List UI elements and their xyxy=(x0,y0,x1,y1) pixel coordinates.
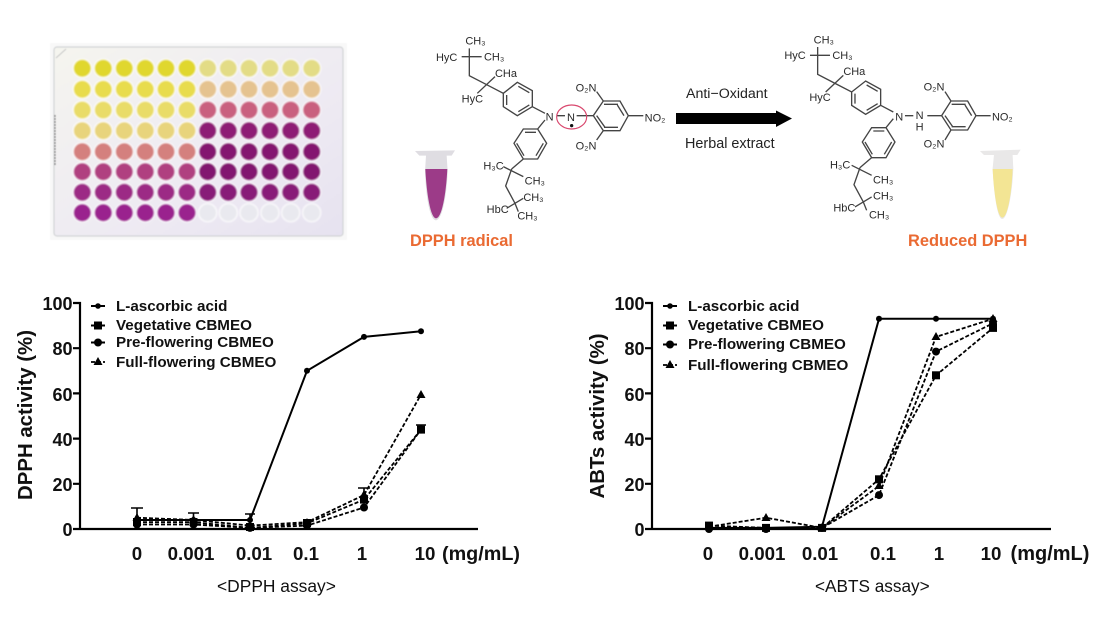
chemical structure: DPPH radical: HyC xyxy=(462,93,483,105)
y axis title: ABTs activity (%) xyxy=(587,333,609,499)
series: Vegetative CBMEO xyxy=(133,426,425,531)
chemical structure: DPPH radical: CHa xyxy=(495,68,518,80)
chemical structure: reduced DPPH: HyC xyxy=(809,92,831,104)
x tick labels: 1 xyxy=(357,543,367,564)
chemical structure: DPPH radical: O₂N xyxy=(576,141,596,153)
icon: purple DPPH tube xyxy=(415,150,455,220)
x tick labels: 0.001 xyxy=(739,543,785,564)
y tick labels: 80 xyxy=(52,339,72,359)
x tick labels: 0 xyxy=(132,543,142,564)
x tick labels: (mg/mL) xyxy=(442,543,520,565)
chemical structure: reduced DPPH: CH₃ xyxy=(873,191,893,203)
arrow: reaction xyxy=(676,110,792,127)
x tick labels: (mg/mL) xyxy=(1011,543,1089,565)
legend xyxy=(663,298,848,374)
chemical structure: DPPH radical: CH₃ xyxy=(523,192,544,204)
chemical structure: DPPH radical: HyC xyxy=(436,52,457,64)
series: Full-flowering CBMEO xyxy=(704,314,998,531)
icon: yellow reduced DPPH tube xyxy=(980,150,1021,219)
series: Pre-flowering CBMEO xyxy=(705,319,997,533)
label: Reduced DPPH: Reduced DPPH xyxy=(908,232,1027,250)
series: Pre-flowering CBMEO xyxy=(133,426,425,532)
y tick labels xyxy=(42,294,72,540)
chemical structure: reduced DPPH: H xyxy=(916,121,924,133)
chemical structure: reduced DPPH: CH₃ xyxy=(832,50,853,62)
x tick labels: 0.001 xyxy=(168,543,214,564)
chemical structure: reduced DPPH xyxy=(784,35,1013,222)
chemical structure: reduced DPPH: CH₃ xyxy=(873,174,893,186)
legend: Full-flowering CBMEO xyxy=(688,357,848,374)
error bars xyxy=(131,425,426,522)
legend: L-ascorbic acid xyxy=(116,298,227,315)
y tick labels: 0 xyxy=(62,520,72,540)
chemical structure: reduced DPPH: CHa xyxy=(843,66,866,78)
y tick labels: 20 xyxy=(52,475,72,495)
chemical structure: reduced DPPH: HyC xyxy=(784,50,806,62)
label: Anti-Oxidant: Anti−Oxidant xyxy=(686,86,768,102)
y tick labels xyxy=(614,294,644,540)
series: Full-flowering CBMEO xyxy=(132,390,426,529)
chemical structure: DPPH radical: CH₃ xyxy=(465,36,486,48)
y tick labels: 60 xyxy=(52,385,72,405)
chemical structure: reduced DPPH: O₂N xyxy=(924,81,944,93)
chart: DPPH assay xyxy=(15,294,520,596)
y tick labels: 40 xyxy=(624,430,644,450)
chemical structure: reduced DPPH: CH₃ xyxy=(814,35,834,47)
y tick labels: 100 xyxy=(42,294,72,314)
legend: Full-flowering CBMEO xyxy=(116,354,276,371)
legend: Vegetative CBMEO xyxy=(116,317,252,334)
series: L-ascorbic acid xyxy=(134,328,424,523)
chemical structure: DPPH radical: NO₂ xyxy=(645,112,665,124)
legend: Pre-flowering CBMEO xyxy=(688,336,846,353)
caption: DPPH assay: <DPPH assay> xyxy=(217,576,336,596)
chemical structure: reduced DPPH: H₃C xyxy=(830,159,850,171)
x tick labels: 10 xyxy=(415,543,435,564)
label: DPPH radical: DPPH radical xyxy=(410,232,513,250)
chemical structure: DPPH radical xyxy=(436,36,665,223)
x tick labels: 0.1 xyxy=(870,543,896,564)
series: L-ascorbic acid xyxy=(706,316,996,531)
caption: ABTS assay: <ABTS assay> xyxy=(815,576,930,596)
chemical structure: DPPH radical: O₂N xyxy=(576,83,596,95)
x tick labels: 10 xyxy=(981,543,1001,564)
y tick labels: 80 xyxy=(624,339,644,359)
chemical structure: DPPH radical: HbC xyxy=(487,204,509,216)
x tick labels xyxy=(703,543,1089,565)
y tick labels: 0 xyxy=(634,520,644,540)
chart: ABTS assay xyxy=(587,294,1089,596)
chemical structure: reduced DPPH: NO₂ xyxy=(992,111,1013,123)
photo: 96-well plate xyxy=(50,43,347,240)
legend: Pre-flowering CBMEO xyxy=(116,334,274,351)
legend: Vegetative CBMEO xyxy=(688,317,824,334)
y tick labels: 60 xyxy=(624,385,644,405)
chemical structure: DPPH radical: N xyxy=(546,111,554,123)
chemical structure: DPPH radical: CH₃ xyxy=(484,51,504,63)
y axis title: DPPH activity (%) xyxy=(15,330,37,500)
chemical structure: DPPH radical: N xyxy=(567,112,575,124)
chemical structure: reduced DPPH: N xyxy=(916,110,924,122)
x tick labels: 0.01 xyxy=(802,543,838,564)
chemical structure: reduced DPPH: O₂N xyxy=(924,138,944,150)
chemical structure: DPPH radical: H₃C xyxy=(483,161,504,173)
y tick labels: 40 xyxy=(52,430,72,450)
legend: L-ascorbic acid xyxy=(688,298,799,315)
x tick labels: 0.1 xyxy=(293,543,319,564)
y tick labels: 100 xyxy=(614,294,644,314)
label: Herbal extract: Herbal extract xyxy=(685,136,775,152)
x tick labels: 1 xyxy=(934,543,944,564)
axes xyxy=(645,303,1051,529)
x tick labels xyxy=(132,543,520,565)
chemical structure: reduced DPPH: N xyxy=(895,111,903,123)
series: Vegetative CBMEO xyxy=(705,324,997,532)
legend xyxy=(91,298,276,371)
x tick labels: 0 xyxy=(703,543,713,564)
chemical structure: reduced DPPH: CH₃ xyxy=(869,210,889,222)
chemical structure: DPPH radical: CH₃ xyxy=(525,175,545,187)
axes xyxy=(73,303,478,529)
y tick labels: 20 xyxy=(624,475,644,495)
chemical structure: reduced DPPH: HbC xyxy=(833,203,855,215)
x tick labels: 0.01 xyxy=(236,543,272,564)
chemical structure: DPPH radical: CH₃ xyxy=(517,211,538,223)
